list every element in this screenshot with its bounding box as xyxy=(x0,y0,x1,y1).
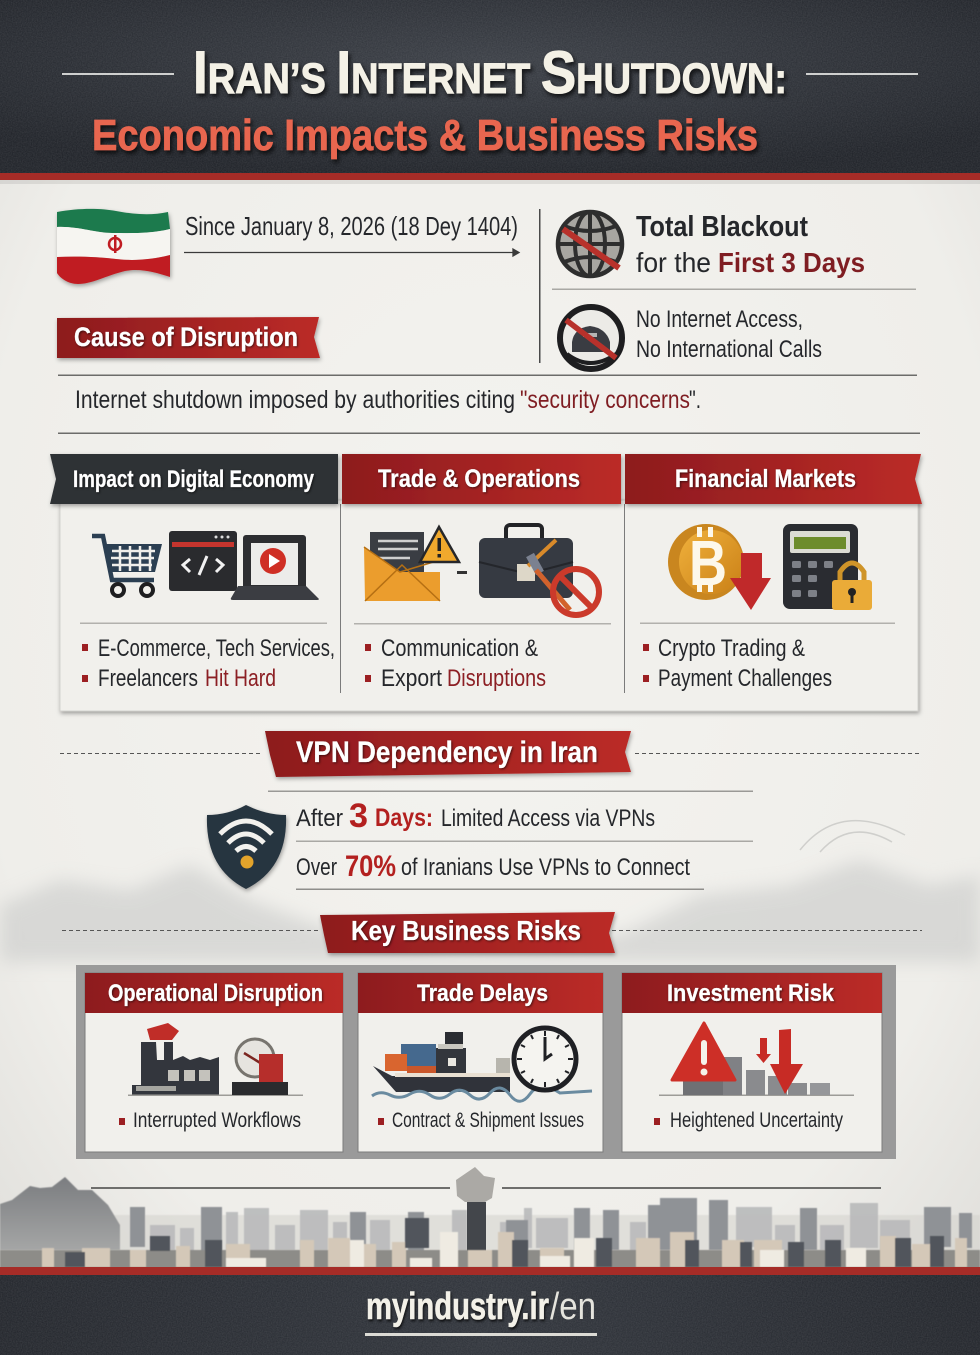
arrow xyxy=(184,249,519,256)
icon: down arrows xyxy=(756,1029,803,1094)
risk text: shipment xyxy=(378,1109,584,1132)
skyline foreground xyxy=(0,1218,980,1268)
divider xyxy=(58,432,920,434)
icon: warning triangle xyxy=(420,527,459,562)
card: operational disruption xyxy=(85,973,343,1152)
title: IRAN’S INTERNET SHUTDOWN: xyxy=(193,39,787,106)
card: investment risk: Investment Risk xyxy=(667,980,835,1007)
footer url: /en xyxy=(550,1286,596,1328)
ribbon: key business risks: Key Business Risks xyxy=(351,915,581,946)
blackout text xyxy=(636,211,865,278)
footer url: myindustry.ir xyxy=(366,1286,549,1328)
header: financial markets: Financial Markets xyxy=(675,465,856,493)
card: investment risk xyxy=(622,973,882,1152)
VPN line one: Limited Access via VPNs xyxy=(441,805,655,832)
VPN line one: Days: xyxy=(375,804,433,832)
header: digital economy xyxy=(50,454,338,504)
divider xyxy=(91,1187,881,1189)
icon: code window xyxy=(169,531,237,591)
divider xyxy=(296,840,753,842)
list: trade xyxy=(365,635,546,692)
ribbon: VPN dependency: VPN Dependency in Iran xyxy=(296,736,598,769)
date text: Since January 8, 2026 (18 Dey 1404) xyxy=(185,211,518,241)
icon: shopping cart xyxy=(92,536,162,596)
icon: Iran flag xyxy=(57,209,170,284)
card: trade delays: Trade Delays xyxy=(417,980,548,1007)
dashed rules xyxy=(60,754,922,930)
list: financial: Payment Challenges xyxy=(658,665,832,692)
panel: business risks xyxy=(76,965,896,1159)
icon: falling bars xyxy=(659,1057,854,1096)
VPN line two xyxy=(296,850,690,883)
VPN line one: After xyxy=(296,805,343,832)
list: trade: Export xyxy=(381,665,442,692)
VPN line two: of Iranians Use VPNs to Connect xyxy=(401,854,690,881)
icon: globe blocked xyxy=(558,212,622,276)
footer band xyxy=(0,1267,980,1355)
icon: phone blocked xyxy=(560,307,622,369)
panel: impact columns xyxy=(50,454,922,711)
list: financial: Crypto Trading & xyxy=(658,635,805,662)
header: digital economy: Impact on Digital Economy xyxy=(73,466,315,493)
minus dash xyxy=(457,571,467,574)
card: operational disruption: Operational Disruption xyxy=(108,980,323,1007)
divider xyxy=(268,790,753,792)
skyline background xyxy=(0,1177,980,1267)
cause text: ". xyxy=(689,386,701,414)
risk text: shipment: Contract & Shipment Issues xyxy=(392,1109,584,1132)
list: trade: Communication & xyxy=(381,635,538,662)
icon: VPN shield xyxy=(207,805,286,889)
blackout text: for the xyxy=(636,247,711,278)
access text: No Internet Access, xyxy=(636,306,803,333)
icon: clock xyxy=(514,1028,576,1090)
header: trade and operations xyxy=(342,454,621,504)
list: financial xyxy=(643,635,832,692)
list: digital economy: E-Commerce, Tech Services, xyxy=(98,635,335,662)
subtitle: Economic Impacts & Business Risks xyxy=(92,111,758,160)
central tower xyxy=(456,1167,495,1251)
risk text: workflows: Interrupted Workflows xyxy=(133,1109,301,1132)
icon: bitcoin coin: B xyxy=(689,527,727,599)
VPN line two: Over xyxy=(296,854,337,881)
list: trade: Disruptions xyxy=(447,665,546,692)
card: trade delays xyxy=(358,973,603,1152)
VPN line one: 3 xyxy=(349,797,368,835)
header: financial markets xyxy=(625,454,922,504)
icon: down arrow xyxy=(730,553,771,610)
divider xyxy=(296,888,704,890)
blackout text: First 3 Days xyxy=(718,247,865,278)
ribbon: cause of disruption: Cause of Disruption xyxy=(74,322,298,352)
access text xyxy=(636,306,822,363)
header: trade and operations: Trade & Operations xyxy=(378,465,580,493)
ribbon: VPN dependency xyxy=(265,731,631,777)
divider xyxy=(552,288,916,290)
risk text: uncertainty: Heightened Uncertainty xyxy=(670,1109,843,1132)
icon: calculator xyxy=(783,524,858,609)
icon: video laptop xyxy=(231,535,319,600)
header band xyxy=(0,0,980,184)
VPN line one xyxy=(296,797,655,835)
icon: briefcase blocked xyxy=(479,525,599,615)
icon: padlock xyxy=(832,563,872,610)
blackout text: Total Blackout xyxy=(636,211,808,243)
ribbon: cause of disruption xyxy=(57,317,320,358)
list: digital economy: Hit Hard xyxy=(205,665,276,692)
misty mountains background xyxy=(0,860,980,962)
access text: No International Calls xyxy=(636,336,822,363)
cause text: "security concerns xyxy=(520,386,690,414)
icon: factory xyxy=(128,1023,303,1096)
VPN line two: 70% xyxy=(345,850,396,883)
icon: envelope xyxy=(364,532,440,601)
icon: bitcoin coin xyxy=(668,524,744,600)
ribbon: key business risks xyxy=(320,912,615,953)
icon: cargo ship xyxy=(372,1032,592,1101)
divider xyxy=(58,374,917,376)
icon: warning triangle xyxy=(672,1023,735,1080)
cause text: Internet shutdown imposed by authorities citing xyxy=(75,386,515,414)
decorative arcs xyxy=(800,821,905,852)
list: digital economy: Freelancers xyxy=(98,665,198,692)
divider xyxy=(539,209,540,363)
list: digital economy xyxy=(82,635,335,692)
